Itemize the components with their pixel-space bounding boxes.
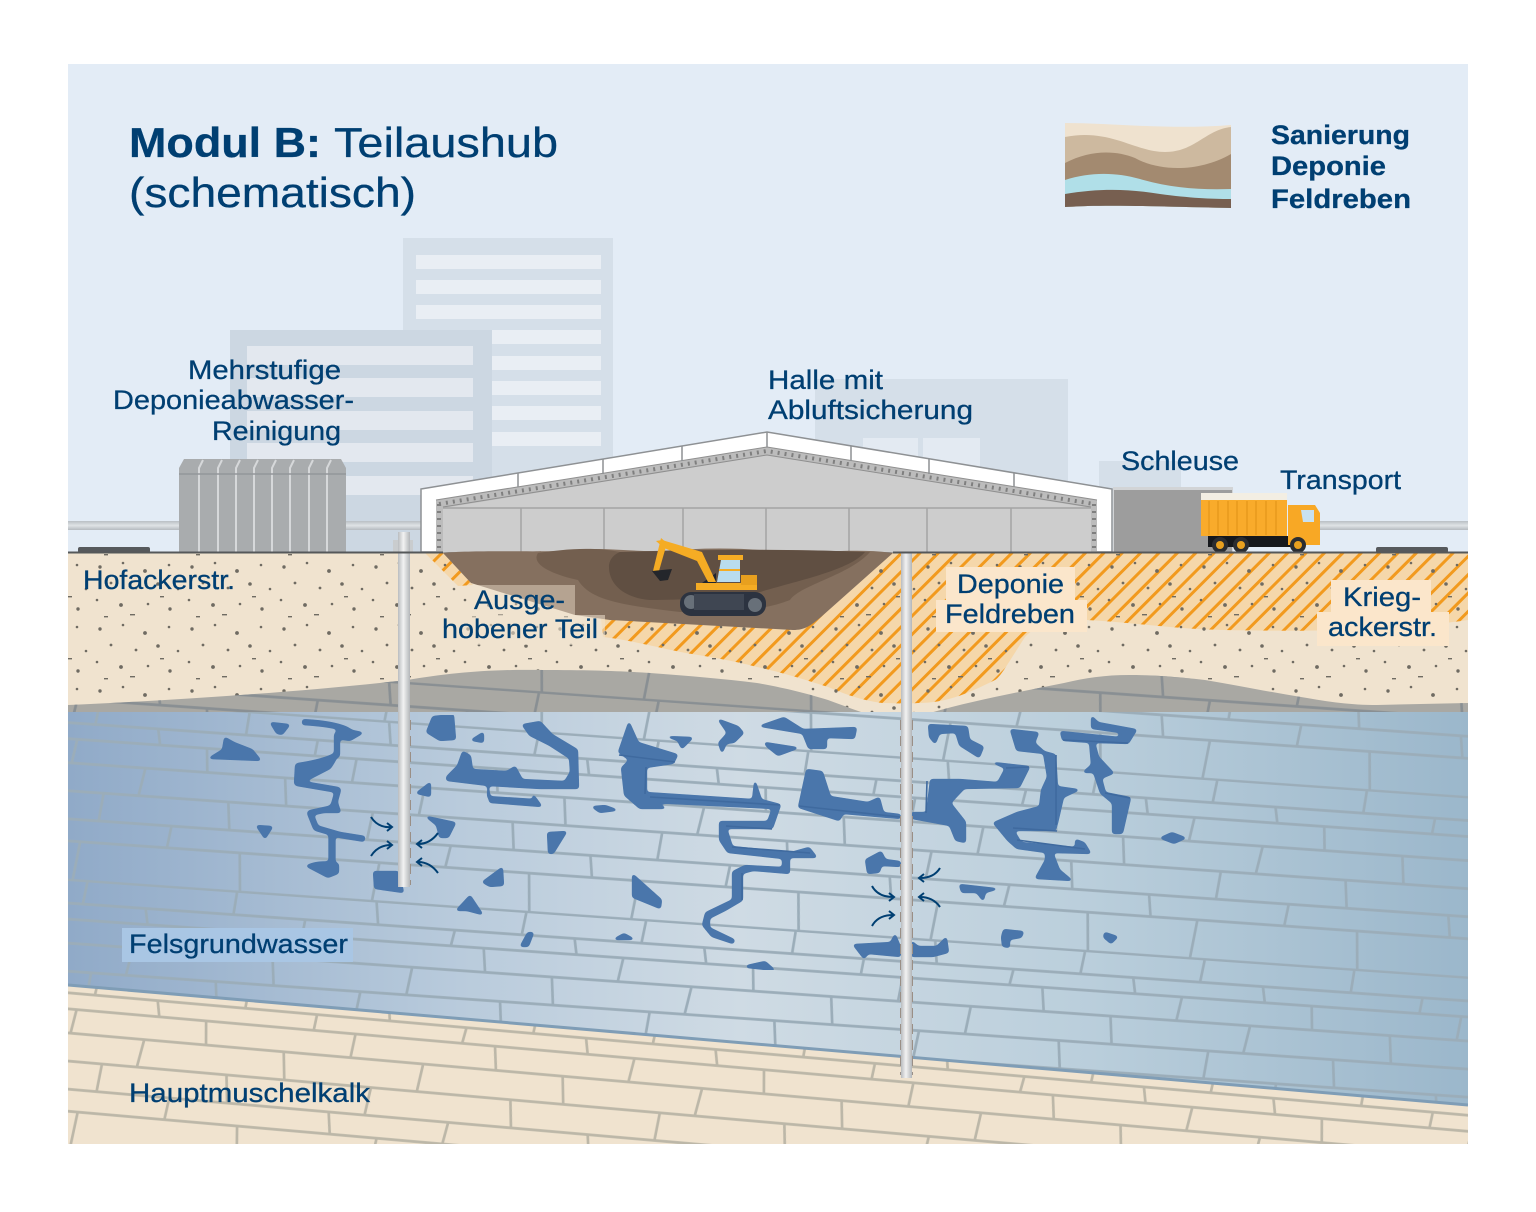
ground line	[68, 552, 1468, 554]
title: Modul B:	[129, 119, 321, 166]
monitoring well right	[901, 553, 912, 1078]
label: hall: Halle mit	[768, 365, 884, 395]
label: hall: Abluftsicherung	[768, 395, 973, 425]
panel: sand layer	[68, 552, 1468, 716]
label: rock groundwater: Felsgrundwasser	[129, 929, 348, 959]
label: lock: Schleuse	[1121, 446, 1239, 476]
label: excavated part	[442, 585, 598, 644]
label: Kriegackerstrasse	[1328, 582, 1437, 642]
label: wastewater treatment	[113, 355, 354, 446]
panel: Deponie Feldreben hatched fill	[425, 553, 1468, 703]
title: Teilaushub	[334, 119, 558, 166]
label: wastewater treatment: Deponieabwasser-	[113, 385, 354, 415]
label: landfill	[945, 569, 1075, 629]
label: landfill: Feldreben	[945, 599, 1075, 629]
label: excavated part: Ausge-	[474, 585, 565, 615]
icon: excavator	[652, 538, 766, 616]
label: Hauptmuschelkalk: Hauptmuschelkalk	[129, 1078, 371, 1108]
icon: truck	[1201, 493, 1320, 553]
label: Hofackerstrasse: Hofackerstr.	[83, 565, 235, 595]
excavated pit	[443, 548, 893, 630]
panel: Felsgrundwasser rock	[68, 712, 1468, 1105]
legend text: Deponie	[1271, 151, 1386, 181]
label: transport: Transport	[1280, 465, 1402, 495]
sand speckle texture	[68, 554, 1468, 714]
panel: sky background	[68, 64, 1468, 564]
panel: Hauptmuschelkalk rock	[68, 985, 1468, 1144]
label: wastewater treatment: Reinigung	[212, 416, 341, 446]
label: hall	[768, 365, 973, 425]
karst water cavities	[210, 715, 1185, 970]
arrows: inflow to wells	[371, 817, 940, 926]
legend text: Sanierung	[1271, 120, 1410, 150]
label: Kriegackerstrasse: Krieg-	[1343, 582, 1421, 612]
legend text	[1271, 120, 1411, 214]
label backgrounds	[122, 567, 1449, 962]
background buildings	[230, 238, 1181, 552]
title	[129, 119, 558, 216]
label: landfill: Deponie	[957, 569, 1064, 599]
label: excavated part: hobener Teil	[442, 614, 598, 644]
legend icon: soil layers	[1065, 123, 1231, 208]
panel: grey weathered rock	[68, 670, 1468, 715]
lock building	[1113, 487, 1233, 552]
monitoring well left	[393, 532, 413, 887]
pipeline above ground	[68, 521, 1468, 553]
label: Kriegackerstrasse: ackerstr.	[1328, 612, 1437, 642]
title: (schematisch)	[129, 169, 416, 216]
legend text: Feldreben	[1271, 184, 1411, 214]
label: wastewater treatment: Mehrstufige	[188, 355, 341, 385]
hall	[421, 432, 1112, 552]
icon: wastewater treatment plant	[179, 459, 346, 552]
